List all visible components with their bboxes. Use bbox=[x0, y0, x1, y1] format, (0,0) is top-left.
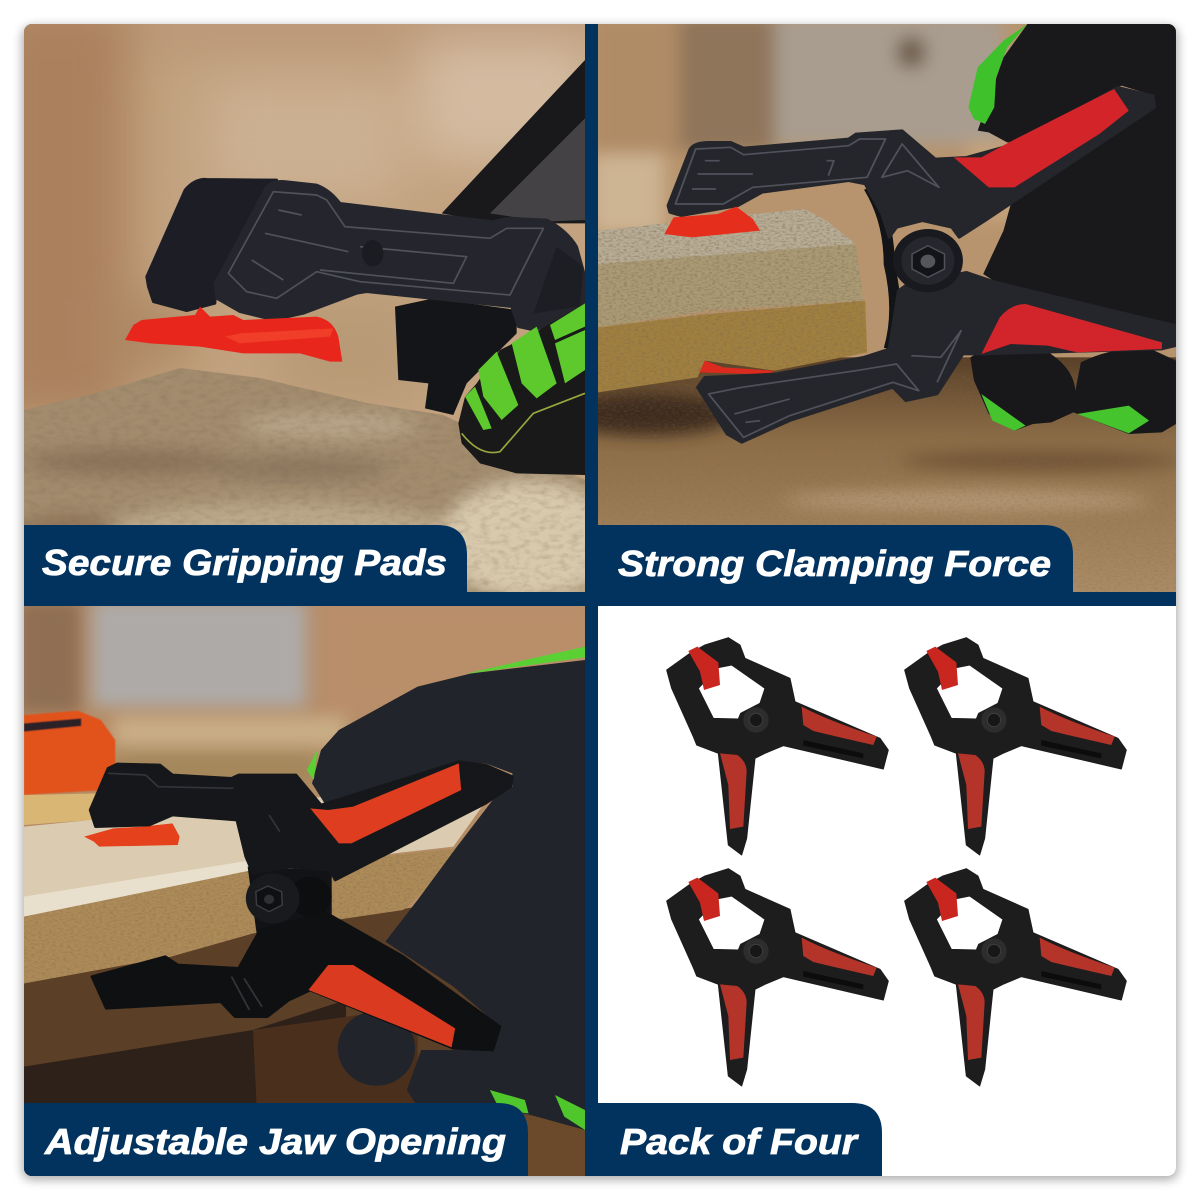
workbench bbox=[557, 357, 1180, 592]
glove with green grips bbox=[458, 303, 585, 475]
panel: secure gripping pads photo bbox=[24, 24, 585, 592]
label: pack of four bbox=[585, 1103, 882, 1176]
icon: red gripping pad bbox=[125, 307, 342, 362]
label: strong clamping force bbox=[585, 525, 1073, 592]
panel: strong clamping force photo bbox=[557, 17, 1180, 592]
clamp: bottom right bbox=[905, 869, 1126, 1086]
glove bbox=[307, 647, 585, 1130]
clamp jaw bbox=[147, 179, 585, 330]
panel: pack of four bbox=[598, 606, 1176, 1176]
label: pack of four: Pack of Four bbox=[620, 1121, 859, 1162]
clamp: bottom left bbox=[667, 869, 888, 1086]
icon: red gripping pad top bbox=[664, 207, 760, 237]
plywood board bbox=[24, 797, 482, 987]
under-bench shadow bbox=[24, 908, 585, 1176]
workshop wood strip bbox=[24, 793, 99, 825]
dark tool in background bbox=[442, 60, 585, 223]
panel: adjustable jaw opening photo bbox=[17, 600, 593, 1180]
label: secure gripping pads bbox=[24, 525, 467, 592]
clamp bbox=[90, 762, 512, 1050]
wood board bbox=[598, 207, 871, 394]
label: secure gripping pads: Secure Gripping Pads bbox=[42, 542, 447, 583]
label: adjustable jaw opening bbox=[24, 1103, 528, 1176]
clamp: top left bbox=[667, 638, 888, 855]
icon: orange tape measure bbox=[24, 711, 115, 795]
glove bbox=[968, 24, 1176, 434]
label: adjustable jaw opening: Adjustable Jaw Opening bbox=[44, 1121, 506, 1162]
clamp pivot bbox=[893, 229, 963, 292]
wood plank bbox=[24, 368, 585, 592]
icon: red gripping pad bottom bbox=[699, 361, 773, 375]
label: strong clamping force: Strong Clamping Force bbox=[618, 543, 1051, 584]
clamp body behind arm bbox=[395, 298, 517, 415]
clamp: top right bbox=[905, 638, 1126, 855]
icon: red gripping pad bbox=[84, 823, 180, 847]
clamp pivot bbox=[246, 885, 332, 917]
clamp bbox=[668, 87, 1176, 442]
